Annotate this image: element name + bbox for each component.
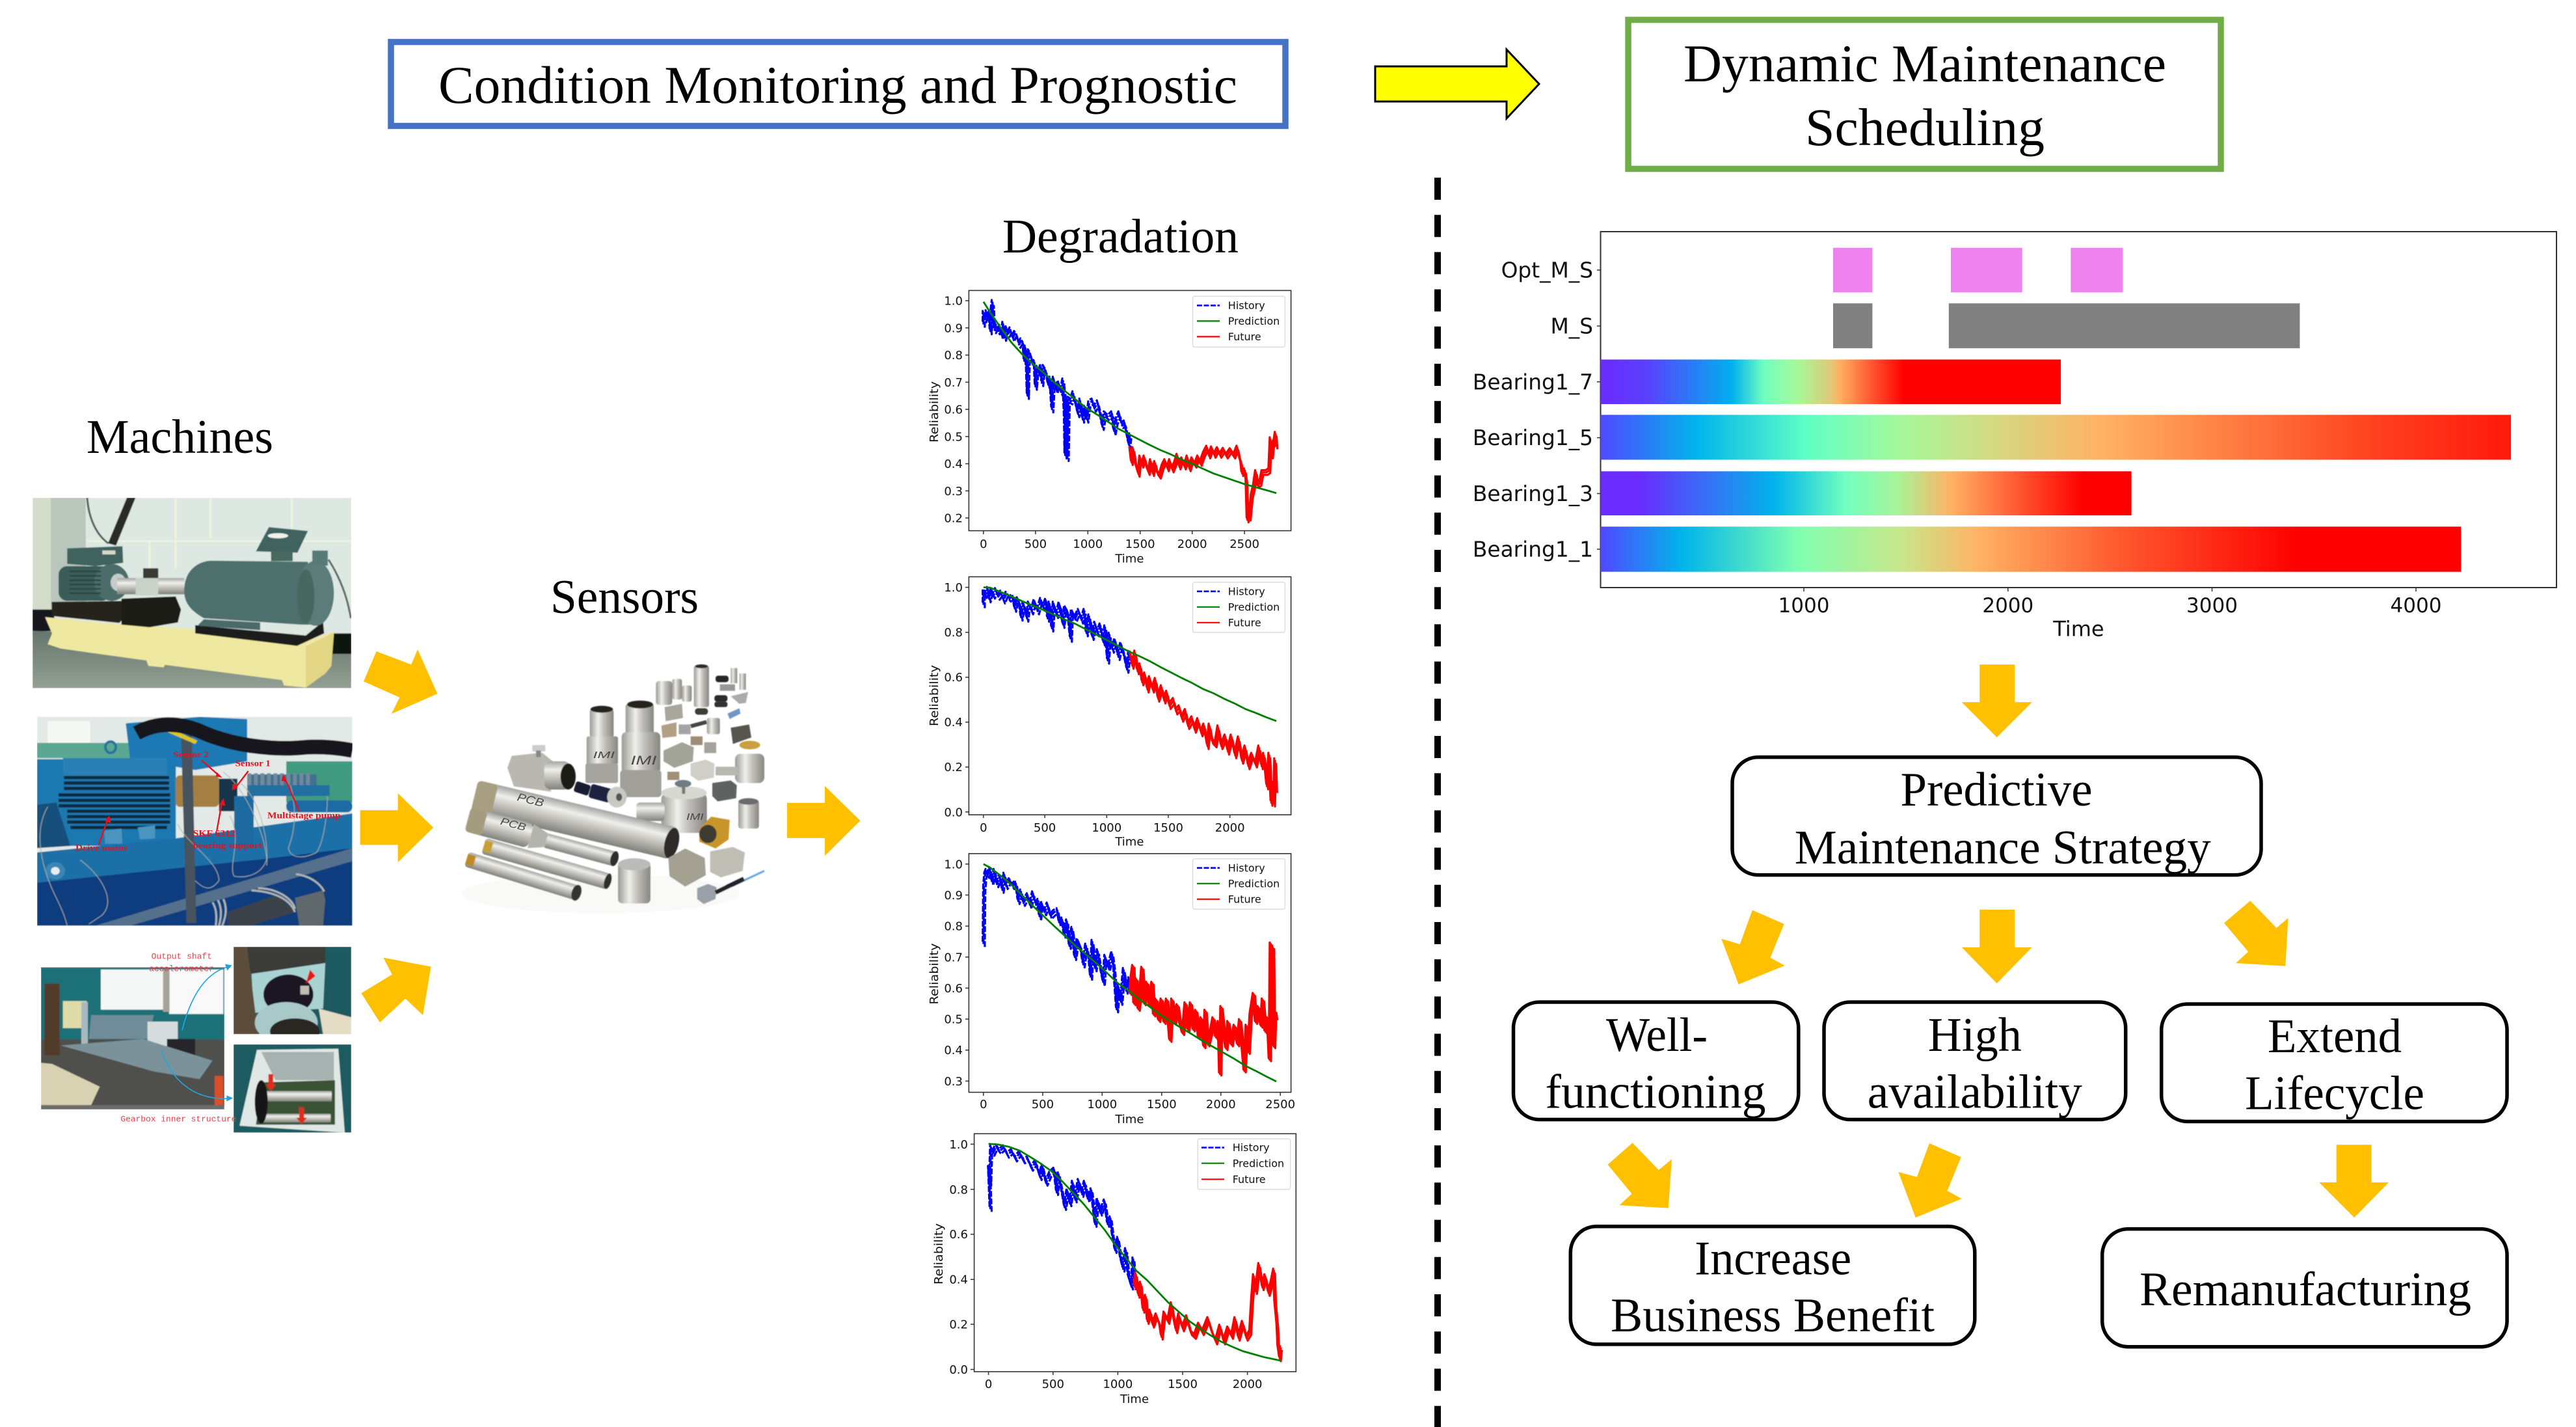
gearbox labels: accelerometer <box>149 964 214 974</box>
legend: History <box>1228 585 1265 597</box>
x axis ticks: 1000 <box>1087 1098 1117 1111</box>
bar: Bearing1_7 <box>1600 359 2061 404</box>
y axis ticks: 0.7 <box>944 951 963 964</box>
y axis labels: Bearing1_1 <box>1473 537 1593 562</box>
x axis ticks: 500 <box>1032 1098 1054 1111</box>
x axis labels <box>1778 588 2441 618</box>
y axis ticks: 0.8 <box>944 920 963 934</box>
bar: Bearing1_3 <box>1600 471 2132 515</box>
x axis ticks <box>980 531 1259 551</box>
x axis ticks: 500 <box>1042 1378 1064 1391</box>
title box: Dynamic Maintenance Scheduling: Dynamic Maintenance <box>1684 34 2166 93</box>
curves <box>988 1144 1282 1361</box>
IMI sensors <box>590 709 613 737</box>
legend: Prediction <box>1228 877 1280 890</box>
box: Increase Business Benefit: Business Benefit <box>1611 1289 1935 1342</box>
chart: degradation curve 3 <box>928 854 1295 1126</box>
bar: Bearing1_1 <box>1600 526 2461 572</box>
heading: Machines: Machines <box>87 411 273 464</box>
photo panel: gearbox bench <box>41 968 224 1109</box>
legend: Prediction <box>1228 315 1280 327</box>
y axis ticks: 0.8 <box>949 1183 968 1197</box>
labels on pump photo: Multistage pump <box>267 811 341 821</box>
x axis ticks: 2500 <box>1265 1098 1295 1111</box>
x axis ticks: 1000 <box>1103 1378 1133 1391</box>
arrows: machines to sensors <box>360 649 437 1022</box>
box: Predictive Maintenance Strategy <box>1732 757 2261 875</box>
optimised maintenance schedule bars <box>1833 248 2123 292</box>
chart: degradation curve 1 <box>928 290 1291 566</box>
sensor brand marks: PCB <box>516 790 545 809</box>
y axis labels <box>1473 258 1600 562</box>
title box: Dynamic Maintenance Scheduling <box>1628 20 2221 169</box>
sensor brand marks: IMI <box>686 812 704 822</box>
x axis labels: 3000 <box>2186 594 2238 618</box>
y axis ticks: 0.5 <box>944 430 963 444</box>
x axis ticks: 500 <box>1034 821 1056 835</box>
photo: gearbox test rig <box>41 947 351 1133</box>
box: Well-functioning: functioning <box>1546 1066 1765 1119</box>
photo: bearing test rig <box>33 498 351 688</box>
y axis ticks: 1.0 <box>944 858 963 871</box>
legend: Future <box>1233 1173 1266 1186</box>
y axis ticks: 1.0 <box>944 295 963 308</box>
arrow: yellow arrow between sections <box>1375 49 1539 118</box>
maintenance schedule bars <box>1833 303 2300 348</box>
box: Increase Business Benefit: Increase <box>1695 1232 1851 1286</box>
legend: Future <box>1228 893 1261 905</box>
x axis ticks <box>985 1372 1263 1391</box>
y axis ticks: 0.6 <box>949 1228 968 1242</box>
x axis ticks: 2500 <box>1229 537 1259 551</box>
y axis label: Reliability <box>928 665 941 726</box>
y axis labels: M_S <box>1550 314 1593 338</box>
box: Well-functioning: Well- <box>1606 1009 1708 1062</box>
x axis label: Time <box>1114 552 1144 566</box>
chart: maintenance schedule gantt <box>1473 232 2556 642</box>
x axis title: Time <box>2052 617 2104 642</box>
box: Extend Lifecycle: Extend <box>2268 1010 2402 1063</box>
legend <box>1193 296 1285 347</box>
box: Extend Lifecycle <box>2162 1004 2507 1122</box>
y axis labels: Bearing1_3 <box>1473 482 1593 506</box>
y axis labels: Bearing1_5 <box>1473 426 1593 450</box>
x axis ticks: 0 <box>980 821 987 835</box>
angled sensor <box>507 753 553 792</box>
x axis labels: 4000 <box>2391 594 2441 618</box>
x axis label: Time <box>1120 1393 1149 1406</box>
y axis label: Reliability <box>928 943 941 1005</box>
legend: History <box>1228 299 1265 312</box>
chart: degradation curve 2 <box>928 577 1291 849</box>
y axis ticks: 0.9 <box>944 889 963 903</box>
cubes <box>699 817 730 849</box>
x axis ticks: 2000 <box>1206 1098 1236 1111</box>
box: Predictive Maintenance Strategy: Maintenance Strategy <box>1795 821 2211 875</box>
y axis ticks: 0.6 <box>944 403 963 417</box>
y axis labels: Opt_M_S <box>1501 258 1593 282</box>
box: Increase Business Benefit <box>1570 1227 1975 1344</box>
y axis ticks: 0.0 <box>949 1363 968 1377</box>
y axis ticks: 0.0 <box>944 806 963 819</box>
legend: Prediction <box>1233 1157 1284 1169</box>
sensor brand marks: PCB <box>499 816 528 834</box>
y axis ticks <box>944 581 969 819</box>
curves <box>983 864 1278 1081</box>
x axis ticks: 1000 <box>1092 821 1121 835</box>
y axis ticks: 0.4 <box>944 457 963 471</box>
x axis label: Time <box>1114 1113 1144 1126</box>
y axis ticks: 0.2 <box>944 761 963 774</box>
y axis ticks: 0.6 <box>944 671 963 685</box>
x axis labels: 1000 <box>1778 594 1829 618</box>
y axis labels: Bearing1_7 <box>1473 370 1593 394</box>
photo panel: gearbox inner structure <box>234 1044 351 1133</box>
labels on pump photo: bearing support <box>193 841 262 850</box>
y axis ticks <box>949 1138 974 1377</box>
box: Extend Lifecycle: Lifecycle <box>2245 1067 2424 1121</box>
legend: Future <box>1228 616 1261 629</box>
heading: Sensors: Sensors <box>550 571 699 624</box>
x axis ticks: 0 <box>980 1098 987 1111</box>
y axis ticks: 0.7 <box>944 376 963 390</box>
y axis ticks: 0.4 <box>944 716 963 729</box>
curves <box>983 587 1277 806</box>
y axis label: Reliability <box>928 381 941 442</box>
y axis ticks: 0.8 <box>944 626 963 640</box>
legend: History <box>1233 1141 1270 1154</box>
y axis ticks: 0.4 <box>949 1273 968 1287</box>
labels on pump photo: Drive motor <box>75 843 128 853</box>
legend <box>1198 1139 1291 1189</box>
curves <box>983 300 1278 523</box>
title box: Condition Monitoring and Prognostic <box>391 42 1285 126</box>
x axis ticks: 1500 <box>1125 537 1155 551</box>
y axis ticks <box>944 295 969 526</box>
gearbox labels: Gearbox inner structure <box>120 1114 236 1124</box>
x axis ticks: 1500 <box>1168 1378 1198 1391</box>
x axis ticks: 2000 <box>1233 1378 1263 1391</box>
title box: Condition Monitoring and Prognostic: Condition Monitoring and Prognostic <box>438 55 1237 115</box>
labels on pump photo: Sensor 2 <box>173 750 209 760</box>
cylinders <box>471 780 682 860</box>
labels on pump photo <box>75 750 341 853</box>
gearbox labels: Output shaft <box>152 951 212 961</box>
image: sensor collection <box>462 664 764 913</box>
labels on pump photo: Sensor 1 <box>235 759 271 768</box>
y axis ticks: 0.9 <box>944 321 963 335</box>
x axis ticks <box>980 1093 1295 1111</box>
arrows: strategy to outcomes <box>1721 901 2288 985</box>
x axis ticks: 1000 <box>1073 537 1103 551</box>
chart: degradation curve 4 <box>932 1134 1296 1406</box>
x axis ticks: 500 <box>1025 537 1047 551</box>
box: High availability: availability <box>1868 1066 2082 1119</box>
y axis ticks: 0.2 <box>944 511 963 526</box>
photo: multistage pump test rig <box>37 716 353 926</box>
gearbox labels <box>120 951 236 1124</box>
box: Predictive Maintenance Strategy: Predictive <box>1901 763 2092 817</box>
y axis label: Reliability <box>932 1223 946 1284</box>
x axis ticks <box>980 815 1245 835</box>
legend: Prediction <box>1228 601 1280 613</box>
callout curves <box>161 964 233 1102</box>
x axis ticks: 1500 <box>1153 821 1183 835</box>
legend <box>1193 859 1285 909</box>
y axis ticks <box>944 858 969 1089</box>
box: Remanufacturing <box>2102 1229 2507 1347</box>
arrow: sensors to degradation <box>787 786 860 856</box>
x axis ticks: 0 <box>985 1378 992 1391</box>
x axis ticks: 2000 <box>1215 821 1245 835</box>
x axis ticks: 1500 <box>1147 1098 1177 1111</box>
box: High availability <box>1824 1002 2126 1119</box>
x axis ticks: 0 <box>980 537 987 551</box>
sensor brand marks <box>499 750 704 834</box>
sensor brand marks: IMI <box>593 750 615 761</box>
sensor brand marks: IMI <box>630 754 657 768</box>
x axis ticks: 2000 <box>1177 537 1207 551</box>
title box: Dynamic Maintenance Scheduling: Scheduling <box>1805 98 2045 157</box>
x axis labels: 2000 <box>1982 594 2033 618</box>
legend: History <box>1228 862 1265 874</box>
y axis ticks: 1.0 <box>944 581 963 595</box>
y axis ticks: 1.0 <box>949 1138 968 1152</box>
y axis ticks: 0.3 <box>944 1075 963 1089</box>
arrow: schedule to strategy <box>1962 664 2032 737</box>
box: High availability: High <box>1928 1009 2022 1062</box>
bar: Bearing1_5 <box>1600 415 2511 459</box>
y axis ticks: 0.5 <box>944 1013 963 1027</box>
legend: Future <box>1228 331 1261 343</box>
big IMI round sensor <box>662 792 707 833</box>
labels on pump photo: SKF 6312 <box>193 829 235 839</box>
arrows: outcomes to benefits <box>1608 1143 2389 1217</box>
x axis label: Time <box>1114 836 1144 849</box>
y axis ticks: 0.4 <box>944 1044 963 1057</box>
y axis ticks: 0.8 <box>944 349 963 362</box>
photo panel: output shaft <box>234 947 351 1035</box>
legend <box>1193 582 1285 632</box>
y axis ticks: 0.3 <box>944 485 963 498</box>
box: Well-functioning <box>1513 1002 1799 1119</box>
y axis ticks: 0.2 <box>949 1318 968 1332</box>
box: Remanufacturing: Remanufacturing <box>2140 1263 2471 1316</box>
section divider <box>1434 178 1441 1427</box>
y axis ticks: 0.6 <box>944 982 963 996</box>
small sensors <box>656 681 672 705</box>
heading: Degradation: Degradation <box>1002 210 1239 264</box>
